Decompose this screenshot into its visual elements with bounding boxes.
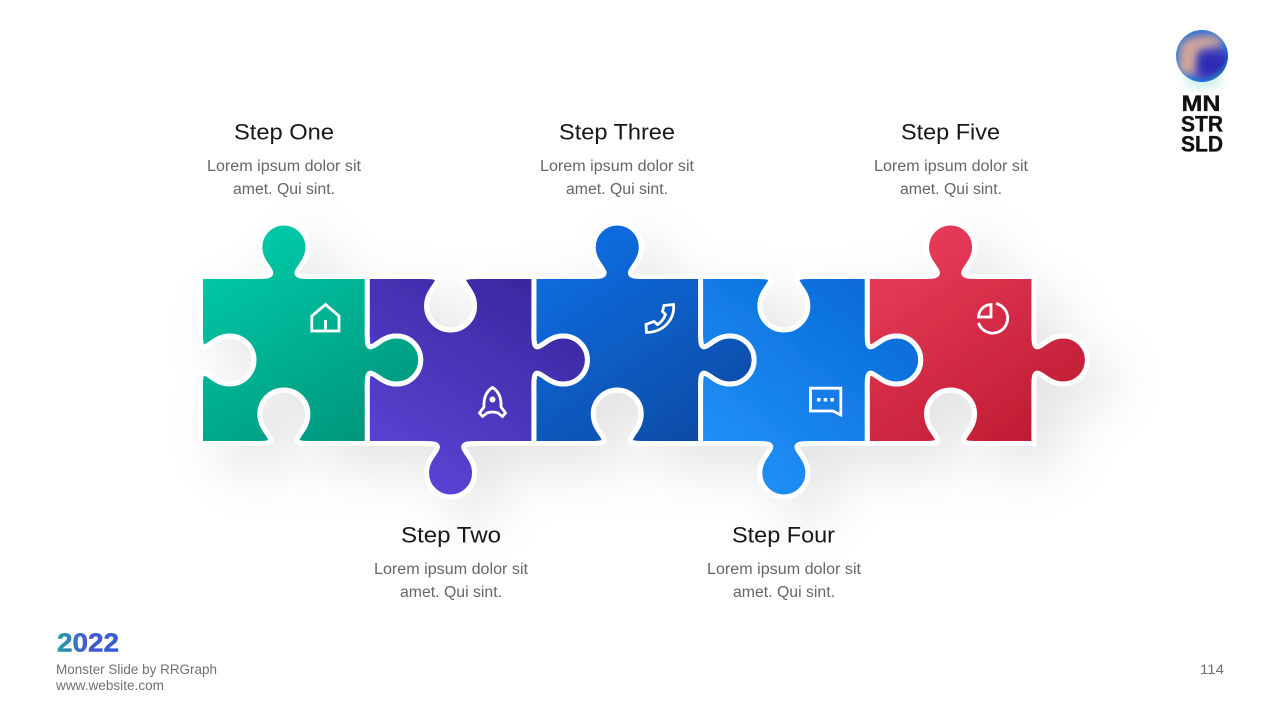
logo: SLD — [1181, 132, 1223, 156]
step five text: amet. Qui sint. — [900, 181, 1002, 198]
puzzle chain — [200, 223, 1087, 497]
piece: step five — [867, 223, 1087, 444]
footer: year and credits: 2022 — [57, 628, 119, 658]
step four text: amet. Qui sint. — [733, 584, 835, 601]
piece: step two — [367, 276, 587, 497]
piece: step three — [534, 223, 754, 444]
step one text: Lorem ipsum dolor sit — [207, 158, 362, 175]
step three text: amet. Qui sint. — [566, 181, 668, 198]
step four text: Step Four — [732, 522, 836, 548]
piece: step one — [200, 223, 421, 444]
footer: year and credits — [55, 628, 217, 693]
icon: phone — [646, 304, 674, 332]
step four text — [707, 522, 862, 601]
step one text — [207, 120, 362, 198]
footer: year and credits: Monster Slide by RRGraph — [56, 662, 217, 677]
icon: house — [312, 304, 339, 331]
step five text: Step Five — [901, 120, 1000, 144]
step two text — [374, 522, 529, 601]
step three text: Lorem ipsum dolor sit — [540, 158, 695, 175]
step three text — [540, 120, 695, 198]
logo: MN — [1182, 91, 1220, 116]
page number: 114 — [1200, 662, 1225, 677]
piece: step four — [700, 276, 921, 497]
step two text: amet. Qui sint. — [400, 584, 502, 601]
step one text: amet. Qui sint. — [233, 181, 335, 198]
step two text: Lorem ipsum dolor sit — [374, 561, 529, 578]
step one text: Step One — [234, 120, 334, 144]
step five text: Lorem ipsum dolor sit — [874, 158, 1029, 175]
icon: rocket — [480, 388, 506, 416]
footer: year and credits: www.website.com — [55, 678, 164, 693]
logo: STR — [1181, 112, 1223, 136]
step two text: Step Two — [401, 522, 501, 548]
step three text: Step Three — [559, 120, 675, 144]
icon: chat bubble — [810, 388, 841, 415]
icon: pie chart — [978, 304, 1008, 333]
step five text — [874, 120, 1029, 198]
logo — [1176, 30, 1228, 156]
step four text: Lorem ipsum dolor sit — [707, 561, 862, 578]
